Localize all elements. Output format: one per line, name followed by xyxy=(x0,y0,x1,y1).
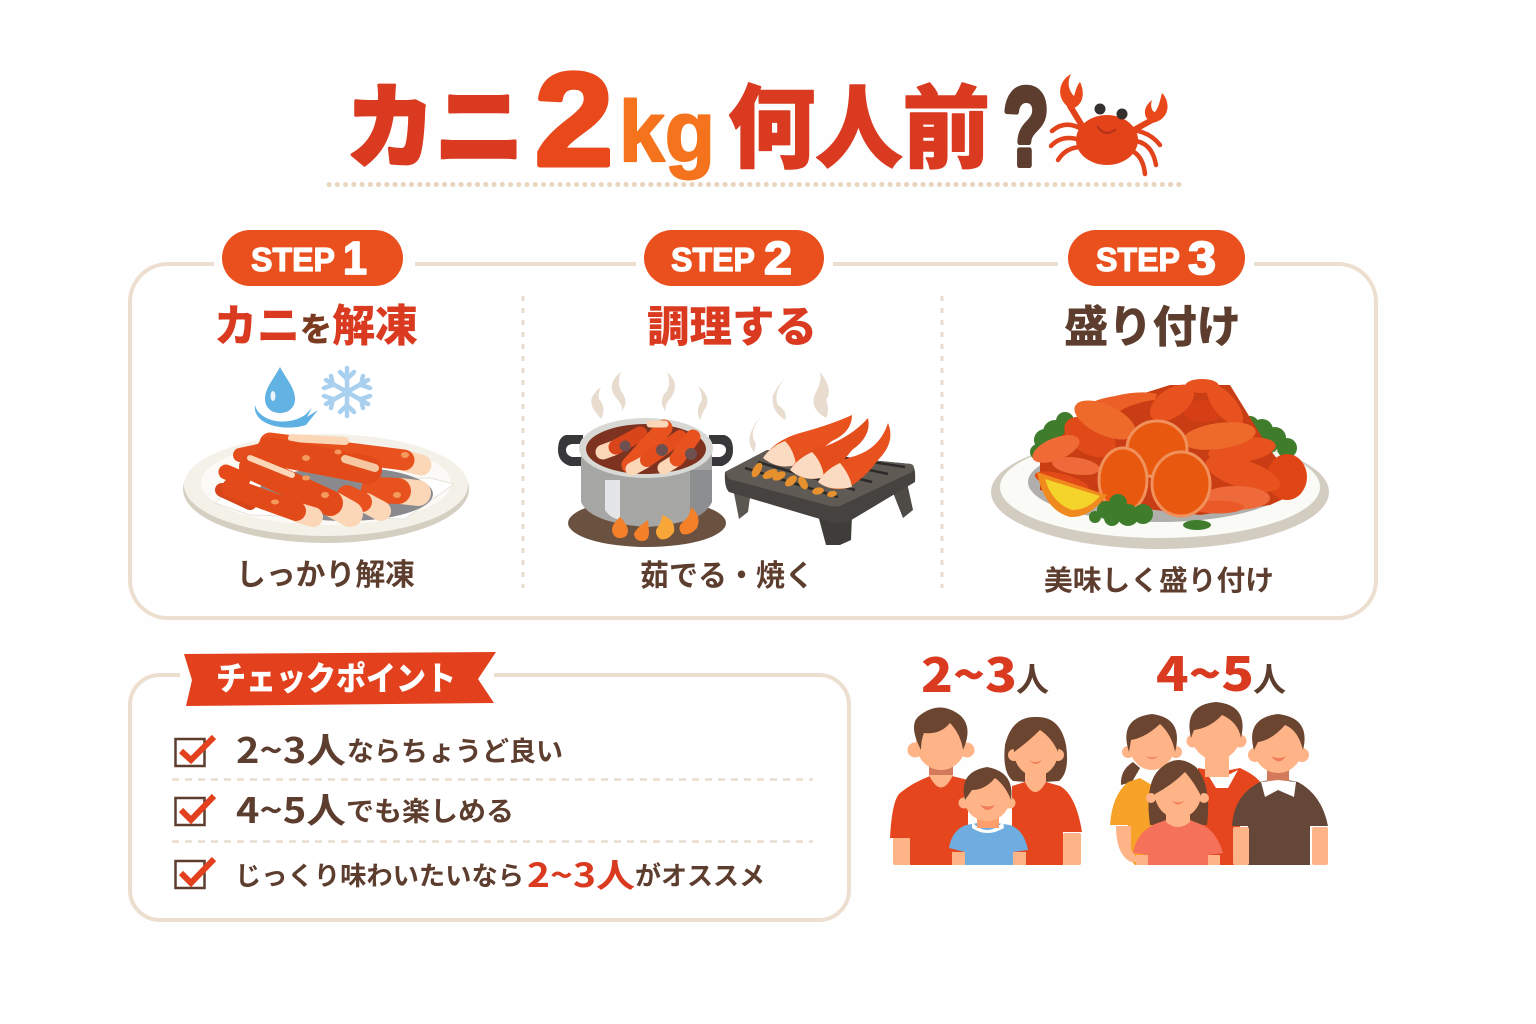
caption: step 2: 茹でる・焼く xyxy=(640,551,814,595)
heading: step 2: 調理する xyxy=(647,293,817,355)
check row 2 xyxy=(176,783,514,834)
step 1 badge: 1 xyxy=(343,232,367,284)
middle adult xyxy=(1186,702,1264,865)
front girl xyxy=(1133,760,1223,865)
check row 1: 2~3人 xyxy=(236,723,346,774)
label: 4-5 people xyxy=(1156,636,1286,705)
caption: step 3: 美味しく盛り付け xyxy=(1044,559,1274,599)
step 3 badge xyxy=(1068,230,1245,286)
left girl xyxy=(1110,714,1182,865)
illustration: family of three xyxy=(890,708,1082,865)
icon: water drop with swoosh xyxy=(255,367,318,428)
title: kg xyxy=(619,84,715,180)
check row 2: でも楽しめる xyxy=(346,790,514,829)
label: 4-5 people: 人 xyxy=(1253,653,1286,701)
dotted title rule xyxy=(329,182,1182,187)
check row 3: がオススメ xyxy=(635,856,765,893)
heading: step 3: 盛り付け xyxy=(1064,291,1241,355)
title: 2 xyxy=(535,46,613,193)
step 1 badge: STEP xyxy=(251,241,335,278)
right adult xyxy=(1232,714,1328,865)
icon: crab xyxy=(1051,74,1168,174)
mother xyxy=(1004,717,1082,865)
illustration: served crab plate xyxy=(991,377,1329,549)
panel: steps xyxy=(130,258,1376,618)
step 2 badge xyxy=(644,230,824,286)
label: 2-3 people: 2~3 xyxy=(921,637,1017,706)
label: 2-3 people: 人 xyxy=(1016,653,1049,701)
ribbon heading: チェックポイント xyxy=(216,652,456,700)
title xyxy=(346,46,1049,193)
title: カニ xyxy=(346,54,524,187)
caption: step 1: しっかり解凍 xyxy=(236,550,415,594)
step 3 badge: 3 xyxy=(1188,232,1216,284)
illustration: family of five xyxy=(1110,702,1328,865)
check row 3: じっくり味わいたいなら xyxy=(235,856,524,893)
panel: check points xyxy=(130,652,849,920)
illustration: thawing crab plate xyxy=(183,434,469,543)
heading: step 1: カニを解凍 xyxy=(214,290,418,354)
check row 3: 2~3人 xyxy=(527,849,635,897)
label: 4-5 people: 4~5 xyxy=(1156,636,1254,705)
step 2 badge: 2 xyxy=(764,232,792,284)
check row 1: ならちょうど良い xyxy=(347,730,563,769)
title: ? xyxy=(1003,66,1049,189)
icon: snowflake xyxy=(324,368,370,416)
illustration: grill with crab legs xyxy=(725,372,915,545)
child xyxy=(949,767,1028,865)
step 3 badge: STEP xyxy=(1096,241,1180,278)
check row 3 xyxy=(176,849,765,897)
father xyxy=(890,708,974,865)
label: 2-3 people xyxy=(921,637,1049,706)
check row 2: 4~5人 xyxy=(236,783,346,834)
step 1 badge xyxy=(222,230,403,286)
step 2 badge: STEP xyxy=(671,241,755,278)
check row 1 xyxy=(176,723,563,774)
illustration: boiling pot xyxy=(558,372,733,547)
title: 何人前 xyxy=(728,56,990,186)
